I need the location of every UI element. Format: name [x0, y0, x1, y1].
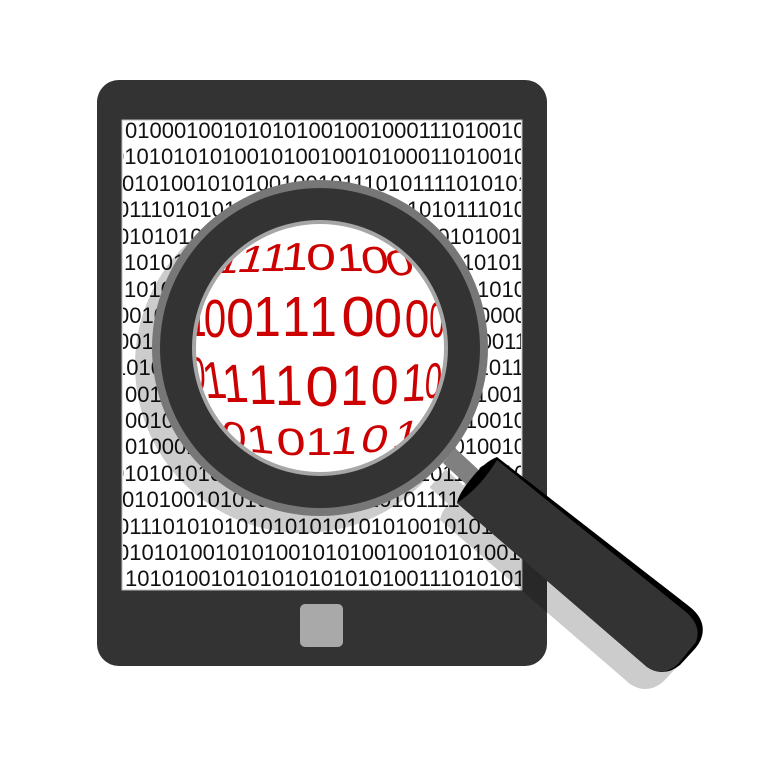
binary text on screen: 0010 [117, 329, 166, 354]
magnified red binary digits: 1 [198, 351, 230, 409]
magnified red binary digits: 1 [244, 417, 276, 463]
outer rim [152, 180, 488, 516]
binary text on screen: 011101010101010101010101001010111101 [117, 514, 549, 539]
binary text on screen: 0101001 [437, 224, 523, 249]
binary text on screen [123, 122, 521, 586]
magnified red binary digits: 1 [190, 289, 206, 348]
lens glass [196, 224, 444, 472]
magnified red binary digits: 1 [210, 240, 250, 281]
magnified red binary digits: 1 [280, 236, 311, 279]
magnified red binary digits: 1 [335, 237, 365, 280]
binary text on screen: 10101 [124, 277, 185, 302]
magnified red binary digits: 0 [226, 288, 254, 350]
binary text on screen: 0111010101010 [117, 197, 273, 222]
magnifier frame [152, 180, 488, 516]
magnified red binary digits: 1 [233, 238, 272, 281]
tablet body [97, 80, 547, 666]
magnified red binary digits: 0 [429, 291, 445, 348]
binary text on screen: 1001 [475, 382, 524, 407]
magnified red binary digits: 0 [204, 289, 226, 350]
handle body [457, 460, 698, 672]
magnified red binary digits: 1 [219, 353, 251, 414]
binary text on screen: 1010111010 [407, 197, 526, 222]
magnified red binary digits: 1 [246, 354, 278, 417]
magnified red binary digits: 1 [329, 420, 361, 463]
magnified red binary digits: 1 [282, 285, 310, 349]
tablet screen [122, 120, 522, 590]
binary text on screen: 0011 [480, 329, 527, 354]
magnified red binary digits: 0 [370, 355, 400, 417]
binary text on screen: 00101 [125, 408, 186, 433]
magnified red binary digits: 0 [357, 417, 393, 462]
magnified red binary digits: 1 [306, 421, 332, 464]
lens edge [192, 220, 448, 476]
binary text on screen: 1010 [114, 355, 163, 380]
magnifier handle [457, 457, 703, 672]
magnified red binary digits: 0 [380, 241, 420, 286]
binary text on screen: 0101001010101010101010101111010100 [122, 487, 533, 512]
binary text on screen: 10010 [465, 408, 526, 433]
magnified red binary digits: 1 [309, 285, 337, 349]
magnified red binary digits: 1 [388, 412, 424, 458]
magnified red binary digits: 0 [187, 347, 207, 403]
magnified red binary digits: 1 [340, 354, 369, 418]
binary text on screen: 010001 [125, 434, 198, 459]
binary text on screen: 010101001010100101010010010101001001 [117, 540, 557, 565]
binary text on screen: 1010100101010101010101001110101011 [125, 566, 536, 591]
magnified red binary digits: 0 [275, 420, 307, 464]
binary text on screen: 01010101010 [117, 224, 252, 249]
magnified red binary digits: 1 [274, 354, 303, 418]
magnified red binary digits: 0 [423, 352, 444, 409]
binary text on screen: 0101001010100100101110101111010101 [122, 171, 530, 196]
binary text on screen: 0000 [478, 303, 527, 328]
magnified red binary digits: 1 [257, 236, 293, 280]
magnifier drop shadow [135, 197, 686, 689]
magnifier connector [443, 448, 482, 488]
magnified red binary digits: 0 [306, 236, 336, 278]
handle black edge [457, 457, 703, 672]
binary text on screen: 010010 [453, 434, 526, 459]
magnified red binary digits: 0 [405, 290, 429, 349]
magnified red binary digits: 0 [341, 285, 375, 349]
binary text on screen: 01010101010101010101010101011010100 [112, 461, 539, 486]
dark ring [160, 188, 480, 508]
binary text on screen: 101010 [124, 250, 197, 275]
binary text on screen: 1011 [477, 355, 524, 380]
binary text on screen: 010001001010101001001000111010010 [125, 118, 526, 143]
magnified red binary digits: 1 [253, 285, 281, 349]
binary text on screen: 10101 [462, 250, 523, 275]
magnified red binary digits: 0 [374, 288, 402, 350]
binary text on screen: 0010 [125, 382, 174, 407]
tablet home button [300, 604, 343, 647]
magnified red binary digits: 0 [220, 412, 248, 459]
binary text on screen: 00100 [117, 303, 178, 328]
magnified red binary digits: 0 [305, 355, 339, 419]
magnified red binary digits [196, 243, 443, 456]
magnified red binary digits: 1 [400, 354, 429, 413]
magnified red binary digits: 0 [358, 239, 392, 282]
binary text on screen: 0101010101001010010010100011010010 [112, 144, 526, 169]
binary text on screen: 1010 [477, 277, 526, 302]
